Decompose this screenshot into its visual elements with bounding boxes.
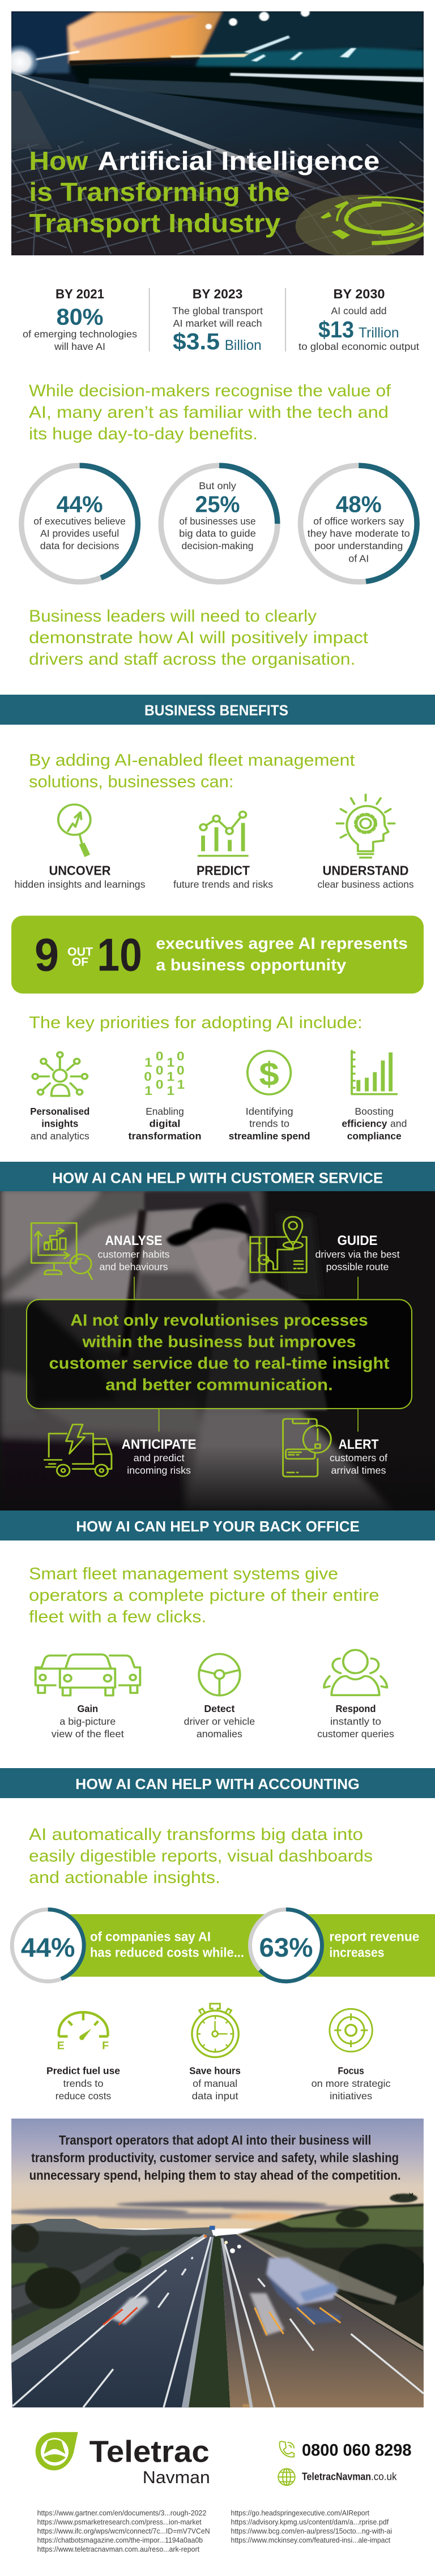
donut: 25% of businesses: decision-making: [181, 540, 254, 551]
label: respond: Respond: [335, 1703, 376, 1714]
photo: delivery driver in cab: [0, 1188, 435, 1512]
label: understand: clear business actions: [317, 879, 414, 890]
callout: AI revolutionises processes: and better communication.: [105, 1376, 333, 1394]
label: alert: ALERT: [339, 1437, 379, 1452]
closing statement: [29, 2133, 401, 2183]
callout: 9 out of 10: 9: [35, 930, 59, 981]
label: predict fuel use: Predict fuel use: [46, 2065, 120, 2077]
title: Transport Industry: [29, 208, 281, 238]
label: focus: Focus: [338, 2065, 364, 2077]
label: analyse: customer habits: [97, 1248, 170, 1260]
icon: map with location pin: [250, 1217, 306, 1272]
heading: key priorities: The key priorities for adopting AI include:: [29, 1013, 362, 1032]
label: uncover: [15, 863, 146, 890]
stat: by 2023: BY 2023: [193, 286, 242, 301]
stat: by 2023: Billion: [225, 337, 262, 353]
label: respond: customer queries: [317, 1728, 394, 1739]
icon: analytics monitor: [31, 1223, 92, 1280]
logo: Teletrac Navman: [36, 2432, 210, 2487]
label: predict fuel use: [46, 2065, 120, 2102]
stat: by 2021: BY 2021: [56, 286, 104, 301]
icon: delivery van with lightning: [44, 1424, 112, 1477]
logo: Teletrac Navman: Teletrac: [89, 2435, 210, 2469]
donut: 44% of executives: [22, 465, 138, 582]
stat: by 2023: AI market will reach: [173, 318, 262, 329]
priority: personalised insights: insights: [41, 1118, 79, 1129]
label: focus: initiatives: [330, 2090, 372, 2102]
priority: digital transformation: transformation: [128, 1130, 202, 1141]
banner: accounting: HOW AI CAN HELP WITH ACCOUNTING: [75, 1775, 360, 1792]
donut: 25% of businesses: of businesses use: [179, 515, 256, 527]
donut: 44% of executives: AI provides useful: [40, 528, 119, 539]
icon: dollar coin: [248, 1051, 291, 1094]
text: revenue increases: [329, 1929, 419, 1959]
intro text: While decision-makers recognise the value of: [29, 382, 391, 400]
donut: 48% of office workers: 48%: [336, 491, 382, 517]
fleet management text: solutions, businesses can:: [29, 773, 233, 791]
icon: rising bar chart: [352, 1051, 396, 1094]
label: save hours: [189, 2065, 241, 2102]
website: .co.uk: [371, 2471, 398, 2482]
sources: left column: https://chatbotsmagazine.com/the-impor...1194a0aa0b: [37, 2536, 203, 2544]
label: analyse: ANALYSE: [105, 1233, 162, 1248]
priority: personalised insights: Personalised: [30, 1106, 89, 1117]
stat: by 2021: [23, 286, 137, 352]
callout: AI revolutionises processes: AI not only revolutionises processes: [70, 1311, 368, 1329]
icon: binary digits: 1: [167, 1084, 174, 1098]
donut: 63% revenue increases: [250, 1910, 322, 1982]
label: understand: UNDERSTAND: [323, 863, 409, 878]
icon: binary digits: 0: [177, 1063, 185, 1077]
priority: digital transformation: Enabling: [146, 1106, 184, 1117]
label: anticipate: ANTICIPATE: [122, 1437, 197, 1452]
label: detect: Detect: [204, 1703, 235, 1714]
stat: by 2030: $13: [318, 316, 354, 343]
donut: 25% of businesses: 25%: [195, 491, 240, 517]
callout: AI revolutionises processes: [27, 1300, 412, 1409]
label: gain: a big-picture: [59, 1715, 116, 1727]
sources: left column: https://www.teletracnavman.com.au/reso...ark-report: [37, 2545, 199, 2553]
accounting text: AI automatically transforms big data into: [29, 1825, 363, 1844]
closing statement: Transport operators that adopt AI into their business will: [59, 2133, 371, 2147]
banner: back office: HOW AI CAN HELP YOUR BACK OFFICE: [76, 1518, 360, 1535]
donut: 48% of office workers: of office workers say: [313, 515, 404, 527]
icon: binary digits: 1: [144, 1084, 152, 1098]
icon: binary digits: 1: [144, 1055, 152, 1069]
icon: binary digits: 1: [177, 1077, 185, 1092]
business leaders text: Business leaders will need to clearly: [29, 607, 317, 626]
label: guide: possible route: [326, 1261, 389, 1272]
sources: left column: https://www.ifc.org/wps/wcm/connect/7c...ID=mV7VCeN: [37, 2527, 210, 2535]
label: predict: future trends and risks: [173, 879, 273, 890]
label: predict fuel use: trends to: [63, 2078, 103, 2089]
callout: AI revolutionises processes: customer service due to real-time insight: [49, 1354, 390, 1372]
fleet management text: [29, 751, 355, 791]
vehicles: [111, 2258, 341, 2335]
stat: by 2030: BY 2030: [333, 286, 385, 301]
sources: left column: [37, 2509, 210, 2553]
icon: globe: [278, 2468, 295, 2485]
donut: 25% of businesses: [161, 465, 278, 582]
stat: by 2030: AI could add: [331, 305, 386, 316]
donut: 48% of office workers: they have moderate to: [308, 528, 410, 539]
sources: right column: https://go.headspringexecutive.com/AIReport: [231, 2509, 369, 2517]
banner: business benefits: [0, 695, 435, 725]
priority: efficiency and compliance: Boosting: [355, 1106, 394, 1117]
text: companies reduced costs: has reduced costs while...: [90, 1945, 244, 1959]
priority: digital transformation: [128, 1106, 202, 1141]
stat: by 2030: [298, 286, 419, 352]
icon: bar chart with trend line: [199, 811, 248, 856]
priority: personalised insights: [30, 1106, 89, 1141]
label: predict: [173, 863, 273, 890]
label: gain: Gain: [77, 1703, 98, 1714]
label: save hours: of manual: [193, 2078, 237, 2089]
back office text: fleet with a few clicks.: [29, 1608, 206, 1627]
label: guide: drivers via the best: [315, 1248, 400, 1260]
accounting text: easily digestible reports, visual dashboards: [29, 1847, 373, 1865]
label: guide: GUIDE: [338, 1233, 377, 1248]
banner: customer service: [0, 1162, 435, 1192]
priority: streamline spend: [229, 1106, 310, 1141]
donut: 25% of businesses: big data to guide: [179, 528, 256, 539]
label: gain: view of the fleet: [52, 1728, 124, 1739]
icon: head with gear and light rays: [337, 795, 394, 858]
label: predict: PREDICT: [197, 863, 250, 878]
icon: fuel gauge: E: [57, 2039, 65, 2052]
sources: right column: https://www.mckinsey.com/featured-insi...ale-impact: [231, 2536, 390, 2544]
priority: efficiency and compliance: compliance: [347, 1130, 402, 1141]
label: focus: on more strategic: [312, 2078, 391, 2089]
stat: by 2030: to global economic output: [298, 341, 419, 352]
icon: customer group: [324, 1650, 387, 1695]
callout: 9 out of 10: OF: [72, 955, 88, 969]
text: companies reduced costs: of companies say AI: [90, 1929, 211, 1944]
icon: binary digits: 1: [167, 1069, 174, 1084]
banner: accounting: [0, 1768, 435, 1798]
priority: efficiency and compliance: efficiency: [342, 1118, 387, 1129]
icon: person network: [32, 1052, 87, 1096]
callout: 9 out of 10: [11, 915, 424, 994]
accounting text: [29, 1825, 373, 1887]
icon: binary digits: 1: [167, 1055, 174, 1069]
hero photo: truck in tunnel over city map: [0, 8, 426, 258]
callout: 9 out of 10: executives agree AI represents: [156, 935, 408, 953]
back office text: Smart fleet management systems give: [29, 1565, 338, 1584]
business leaders text: drivers and staff across the organisation.: [29, 650, 356, 669]
label: understand: [317, 863, 414, 890]
icon: three cars: [36, 1654, 140, 1696]
intro text: its huge day-to-day benefits.: [29, 425, 258, 443]
fleet management text: By adding AI-enabled fleet management: [29, 751, 355, 770]
accounting text: and actionable insights.: [29, 1868, 220, 1887]
stat: by 2030: Trillion: [359, 325, 399, 341]
icon: binary digits: [144, 1049, 185, 1098]
donut: 44% of executives: data for decisions: [40, 540, 120, 551]
panel: motorway photo with closing statement: [6, 2117, 427, 2407]
panel: accounting stat bar: [12, 1910, 435, 1982]
panel: customer service photo: [0, 1188, 435, 1512]
map streets: [11, 142, 424, 255]
hero panel: [0, 8, 426, 258]
callout: 9 out of 10: OUT: [67, 945, 93, 958]
title: Artificial Intelligence: [97, 146, 379, 176]
icon: target: [330, 2009, 372, 2052]
donut: 25% of businesses: But only: [199, 480, 236, 491]
icon: steering wheel: [199, 1654, 240, 1696]
label: focus: [312, 2065, 391, 2102]
label: anticipate: [122, 1437, 197, 1476]
stat: by 2021: will have AI: [54, 341, 105, 352]
donut: 44% of executives: 44%: [57, 491, 103, 517]
title: [29, 146, 379, 238]
text: revenue increases: increases: [329, 1945, 384, 1959]
donut: 48% of office workers: of AI: [348, 553, 369, 564]
label: alert: [330, 1439, 387, 1474]
sources: right column: https://advisory.kpmg.us/content/dam/a...rprise.pdf: [231, 2518, 389, 2526]
icon: magnifier with trend: [58, 805, 91, 857]
icon: phone with alert bubble: [283, 1419, 331, 1477]
label: save hours: data input: [192, 2090, 238, 2102]
icon: binary digits: 0: [144, 1069, 152, 1084]
priority: efficiency and compliance: and: [390, 1118, 407, 1129]
label: detect: driver or vehicle: [184, 1715, 255, 1727]
icon: binary digits: 0: [156, 1063, 163, 1077]
icon: binary digits: 0: [177, 1049, 185, 1063]
icon: fuel gauge: F: [102, 2039, 109, 2052]
callout: 9 out of 10: a business opportunity: [156, 956, 346, 974]
website: TeletracNavman: [302, 2471, 371, 2482]
label: respond: instantly to: [330, 1715, 381, 1727]
priority: personalised insights: and analytics: [31, 1130, 89, 1141]
donut: 48% of office workers: poor understanding: [314, 540, 403, 551]
donut: 48% of office workers: [300, 465, 417, 582]
icon: binary digits: 0: [156, 1049, 163, 1063]
text: revenue increases: report revenue: [329, 1929, 419, 1944]
text: companies reduced costs: [90, 1929, 244, 1959]
label: guide: [315, 1233, 400, 1272]
sources: right column: https://www.bcg.com/en-au/press/15octo...ng-with-ai: [231, 2527, 392, 2535]
logo: Teletrac Navman: Navman: [143, 2467, 210, 2487]
callout: 9 out of 10: 10: [97, 930, 142, 981]
label: alert: arrival times: [331, 1465, 386, 1476]
label: save hours: Save hours: [189, 2065, 241, 2077]
intro text: AI, many aren’t as familiar with the tech and: [29, 403, 389, 422]
priority: streamline spend: streamline spend: [229, 1130, 310, 1141]
title: is Transforming the: [29, 177, 290, 207]
callout: AI revolutionises processes: within the business but improves: [82, 1333, 356, 1351]
label: anticipate: and predict: [134, 1452, 185, 1464]
priority: efficiency and compliance: [342, 1106, 407, 1141]
banner: back office: [0, 1510, 435, 1541]
icon: dollar coin: $: [259, 1056, 279, 1092]
stat: by 2021: of emerging technologies: [23, 328, 137, 340]
business leaders text: [29, 607, 369, 669]
icon: phone: [279, 2441, 294, 2457]
intro text: [29, 382, 391, 443]
phone number: 0800 060 8298: [302, 2441, 411, 2459]
donut: 44% reduced costs: 44%: [21, 1932, 75, 1962]
sources: right column: [231, 2509, 392, 2544]
icon: stopwatch: [192, 2004, 238, 2057]
sources: left column: https://www.psmarketresearch.com/press...ion-market: [37, 2518, 202, 2526]
label: analyse: [98, 1235, 169, 1270]
priority: streamline spend: trends to: [249, 1118, 289, 1129]
banner: business benefits: BUSINESS BENEFITS: [144, 701, 288, 718]
donut: 44% of executives: of executives believe: [33, 515, 126, 527]
label: respond: [317, 1703, 394, 1739]
title: How: [29, 146, 88, 176]
banner: customer service: HOW AI CAN HELP WITH CUSTOMER SERVICE: [52, 1170, 383, 1187]
label: uncover: UNCOVER: [49, 863, 111, 878]
closing statement: unnecessary spend, helping them to stay ahead of the competition.: [29, 2168, 401, 2183]
icon: binary digits: 0: [156, 1077, 163, 1092]
label: predict fuel use: reduce costs: [56, 2090, 111, 2102]
stat: by 2021: 80%: [57, 304, 103, 330]
stat: by 2023: $3.5: [173, 328, 220, 354]
donut: 44% reduced costs: [12, 1910, 84, 1982]
photo: motorway at dusk: [6, 2117, 427, 2407]
back office text: [29, 1565, 379, 1627]
icon: fuel gauge: [57, 2012, 109, 2052]
stat: by 2023: [172, 286, 263, 354]
label: gain: [52, 1703, 124, 1739]
sources: left column: https://www.gartner.com/en/documents/3...rough-2022: [37, 2509, 206, 2517]
closing statement: transform productivity, customer service and safety, while slashing: [31, 2150, 399, 2165]
label: detect: anomalies: [197, 1728, 242, 1739]
label: alert: customers of: [330, 1452, 387, 1464]
label: uncover: hidden insights and learnings: [15, 879, 146, 890]
label: anticipate: incoming risks: [127, 1465, 191, 1476]
green target marker: [296, 195, 426, 258]
stat: by 2023: The global transport: [172, 305, 263, 316]
business leaders text: demonstrate how AI will positively impact: [29, 628, 369, 647]
priority: digital transformation: digital: [150, 1118, 180, 1129]
priority: streamline spend: Identifying: [246, 1106, 293, 1117]
label: analyse: and behaviours: [100, 1261, 168, 1272]
back office text: operators a complete picture of their entire: [29, 1586, 379, 1605]
label: detect: [184, 1703, 255, 1739]
donut: 63% revenue increases: 63%: [259, 1932, 313, 1962]
